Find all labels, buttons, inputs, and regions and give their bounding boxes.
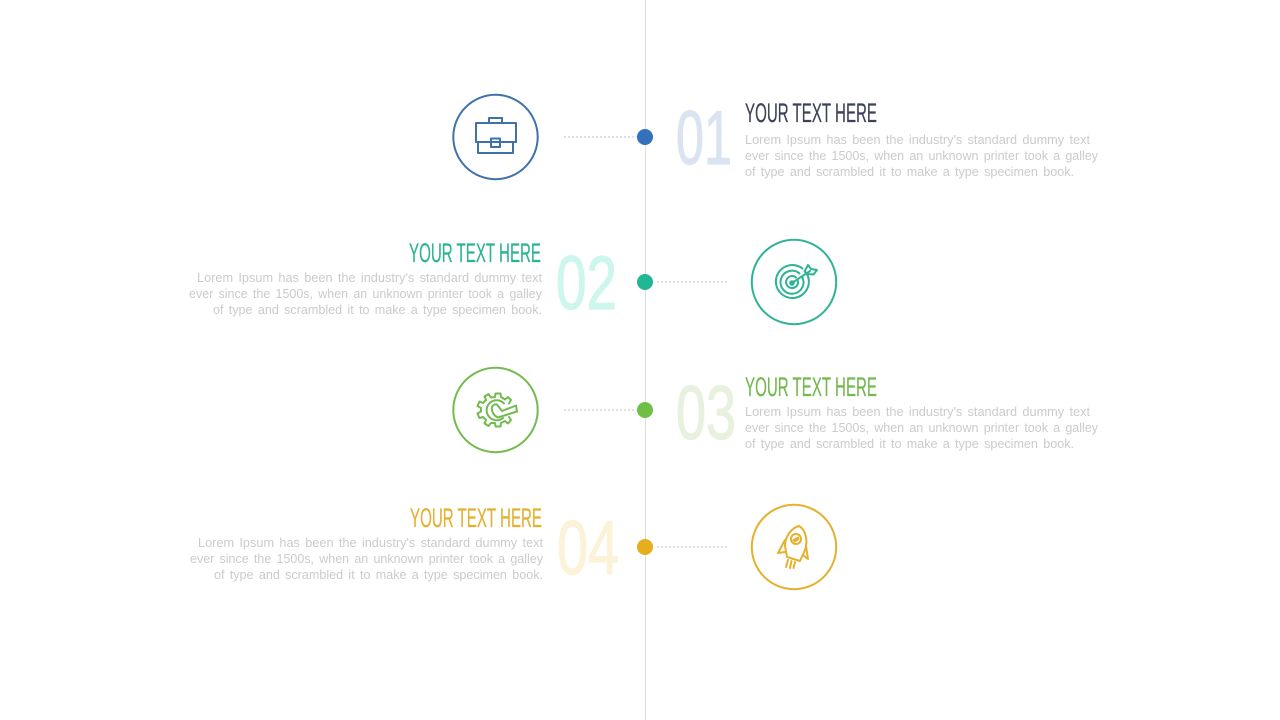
text block: step 2: ever since the 1500s, when an unknown printer took a galley (189, 286, 543, 301)
panel: step 3 (453, 368, 1099, 456)
heading: step 1: YOUR TEXT HERE (745, 98, 877, 128)
timeline dot: step 4 (637, 539, 653, 555)
number 03: 03 (676, 371, 736, 456)
text block: step 1 (745, 132, 1099, 179)
icon: rocket (752, 505, 836, 589)
timeline axis (644, 0, 646, 720)
text block: step 2 (189, 270, 543, 317)
icon: briefcase (453, 95, 538, 179)
heading: step 2: YOUR TEXT HERE (409, 238, 541, 268)
timeline dot: step 2 (637, 274, 653, 290)
number 04: 04 (557, 506, 619, 591)
timeline dot: step 1 (637, 129, 653, 145)
number 02: 02 (556, 241, 617, 326)
connector: step 1 (564, 136, 637, 138)
panel: step 4 (190, 503, 836, 591)
text block: step 3: of type and scrambled it to make a type specimen book. (745, 436, 1074, 451)
panel: step 1 (453, 95, 1099, 181)
icon: target (752, 240, 836, 324)
text block: step 3: Lorem Ipsum has been the industry's standard dummy text (745, 404, 1090, 419)
heading: step 3: YOUR TEXT HERE (745, 372, 877, 402)
text block: step 3 (745, 404, 1099, 451)
panel: step 2 (189, 238, 836, 326)
text block: step 4: Lorem Ipsum has been the industry's standard dummy text (198, 535, 543, 550)
text block: step 4: ever since the 1500s, when an unknown printer took a galley (190, 551, 544, 566)
text block: step 1: of type and scrambled it to make a type specimen book. (745, 164, 1074, 179)
connector: step 3 (564, 409, 637, 411)
text block: step 4: of type and scrambled it to make a type specimen book. (214, 567, 543, 582)
connector: step 2 (657, 281, 728, 283)
heading: step 4: YOUR TEXT HERE (410, 503, 542, 533)
text block: step 1: Lorem Ipsum has been the industry's standard dummy text (745, 132, 1090, 147)
text block: step 3: ever since the 1500s, when an unknown printer took a galley (745, 420, 1099, 435)
text block: step 2: Lorem Ipsum has been the industry's standard dummy text (197, 270, 542, 285)
connector: step 4 (657, 546, 728, 548)
number 01: 01 (676, 96, 732, 181)
text block: step 1: ever since the 1500s, when an unknown printer took a galley (745, 148, 1099, 163)
text block: step 2: of type and scrambled it to make a type specimen book. (213, 302, 542, 317)
text block: step 4 (190, 535, 544, 582)
timeline dot: step 3 (637, 402, 653, 418)
icon: gear with check (453, 368, 538, 452)
